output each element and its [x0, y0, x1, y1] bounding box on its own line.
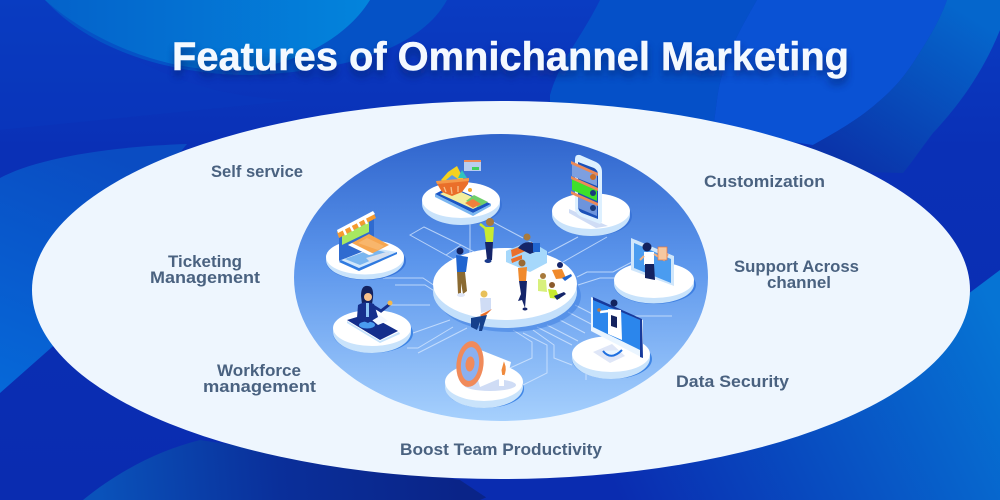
label: Support Across channel: Support Across: [734, 258, 859, 276]
figure: man with laptop: [471, 290, 492, 331]
title: Features of Omnichannel Marketing: [172, 41, 850, 85]
label: Data Security: Data Security: [676, 373, 790, 391]
circuit lines: [383, 222, 672, 385]
icon: woman: [640, 242, 668, 280]
platform: central disk: [433, 248, 581, 332]
label: Ticketing Management: [150, 253, 261, 287]
icon: dark tablet: [347, 314, 400, 343]
icon: paper: [372, 315, 388, 325]
icon: megaphone: [454, 340, 511, 388]
platform: doctor monitor: [572, 297, 652, 379]
icon: map tablet: [435, 186, 491, 216]
icon: megaphone shadow: [464, 379, 516, 391]
platform: megaphone: [445, 340, 524, 408]
icon: shopping basket: [436, 166, 469, 196]
platform: laptop storefront: [326, 211, 406, 280]
icon: doctor: [597, 300, 622, 340]
icon: small card: [464, 160, 481, 171]
panel: inner blue ellipse: [294, 134, 708, 421]
label: Customization: Customization: [704, 173, 825, 191]
label: Workforce management: [203, 362, 317, 396]
figure: man on sofa: [506, 234, 547, 272]
label: Support Across channel: channel: [767, 274, 831, 292]
label: Workforce management: management: [203, 378, 317, 396]
title: Features of Omnichannel Marketing: [172, 35, 849, 79]
labels: [150, 163, 859, 459]
platform: headset agent: [333, 286, 413, 353]
label: Ticketing Management: Management: [150, 269, 261, 287]
figure: man in blue: [456, 248, 468, 297]
panel: outer ellipse: [32, 101, 970, 479]
platform: basket / shopping: [422, 160, 502, 225]
label: Support Across channel: [734, 258, 859, 292]
icon: panel screen: [631, 238, 674, 286]
icon: phone shadow: [569, 209, 608, 228]
label: Workforce management: Workforce: [217, 362, 301, 380]
label: Ticketing Management: Ticketing: [168, 253, 242, 271]
platform: phone: [552, 155, 632, 236]
label: Self service: Self service: [211, 163, 303, 181]
icon: monitor: [591, 297, 643, 358]
icon: monitor stand: [593, 344, 625, 363]
platform: support / woman with document: [614, 238, 696, 304]
icon: awning: [337, 211, 376, 238]
icon: laptop: [339, 212, 397, 271]
figure: woman in orange: [518, 260, 528, 310]
figure: seated group: [538, 262, 572, 300]
icon: agent: [357, 286, 392, 323]
icon: smartphone: [571, 155, 602, 224]
figures on central disk: [456, 218, 572, 331]
icon: credit card: [348, 234, 389, 255]
label: Boost Team Productivity: Boost Team Productivity: [400, 441, 603, 459]
figure: woman in yellow: [480, 218, 494, 263]
